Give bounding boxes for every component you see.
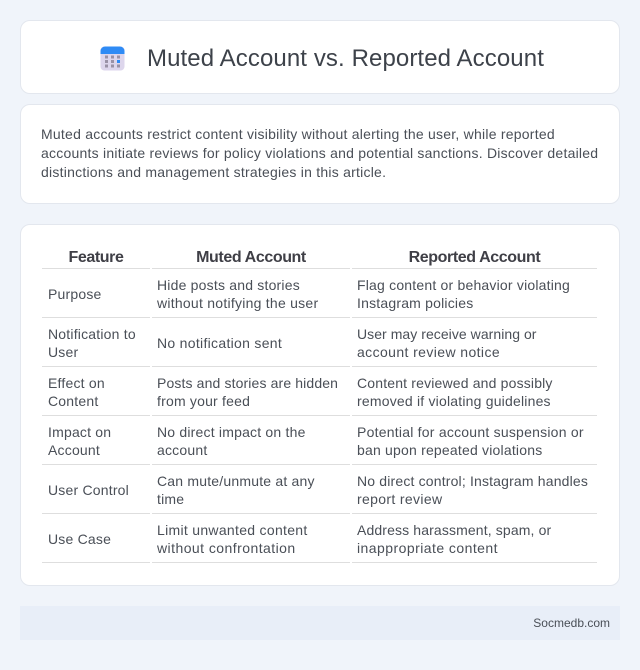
table header: Feature [68, 249, 124, 266]
row: use case: without confrontation [157, 540, 296, 556]
table header: Reported Account [409, 249, 540, 266]
row: effect on content: Content reviewed and possibly [357, 375, 553, 391]
row: purpose: Hide posts and stories [157, 277, 300, 293]
row: user control: report review [357, 491, 442, 507]
row: use case: Use Case [48, 531, 111, 547]
table header [42, 249, 597, 269]
row: use case: Limit unwanted content [157, 522, 308, 538]
row: user control: Can mute/unmute at any [157, 473, 315, 489]
row: impact on account: No direct impact on the [157, 424, 306, 440]
comparison table panel [20, 224, 620, 586]
row: notification to user [42, 326, 597, 367]
intro paragraph [41, 126, 598, 180]
row: effect on content: Content [48, 393, 98, 409]
row: use case [42, 522, 597, 563]
row: purpose [42, 277, 597, 318]
row: impact on account: Account [48, 442, 100, 458]
row: user control: User Control [48, 482, 129, 498]
row: impact on account [42, 424, 597, 465]
heading: Muted Account vs. Reported Account [147, 45, 544, 72]
title card [20, 20, 620, 94]
row: effect on content: Posts and stories are hidden [157, 375, 338, 391]
intro text panel [20, 104, 620, 204]
row: user control: No direct control; Instagram handles [357, 473, 588, 489]
intro paragraph: distinctions and management strategies in this article. [41, 164, 386, 180]
row: notification to user: account review notice [357, 344, 500, 360]
row: impact on account: account [157, 442, 207, 458]
icon: calendar [100, 46, 124, 70]
row: effect on content: from your feed [157, 393, 250, 409]
intro paragraph: Muted accounts restrict content visibility without alerting the user, while reported [41, 126, 555, 142]
row: impact on account: Impact on [48, 424, 111, 440]
row: purpose: Purpose [48, 286, 102, 302]
row: purpose: without notifying the user [157, 295, 318, 311]
row: user control [42, 473, 597, 514]
row: purpose: Flag content or behavior violating [357, 277, 570, 293]
row: effect on content: Effect on [48, 375, 105, 391]
row: impact on account: ban upon repeated violations [357, 442, 542, 458]
row: user control: time [157, 491, 184, 507]
row: notification to user: No notification sent [157, 335, 282, 351]
row: use case: Address harassment, spam, or [357, 522, 551, 538]
row: notification to user: User may receive warning or [357, 326, 537, 342]
row: use case: inappropriate content [357, 540, 498, 556]
footer bar [20, 606, 620, 640]
footer source text: Socmedb.com [533, 616, 610, 630]
intro paragraph: accounts initiate reviews for policy violations and potential sanctions. Discover detailed [41, 145, 598, 161]
table header: Muted Account [196, 249, 306, 266]
row: notification to user: User [48, 344, 78, 360]
row: purpose: Instagram policies [357, 295, 473, 311]
row: notification to user: Notification to [48, 326, 136, 342]
row: effect on content: removed if violating guidelines [357, 393, 551, 409]
row: effect on content [42, 375, 597, 416]
row: impact on account: Potential for account suspension or [357, 424, 584, 440]
